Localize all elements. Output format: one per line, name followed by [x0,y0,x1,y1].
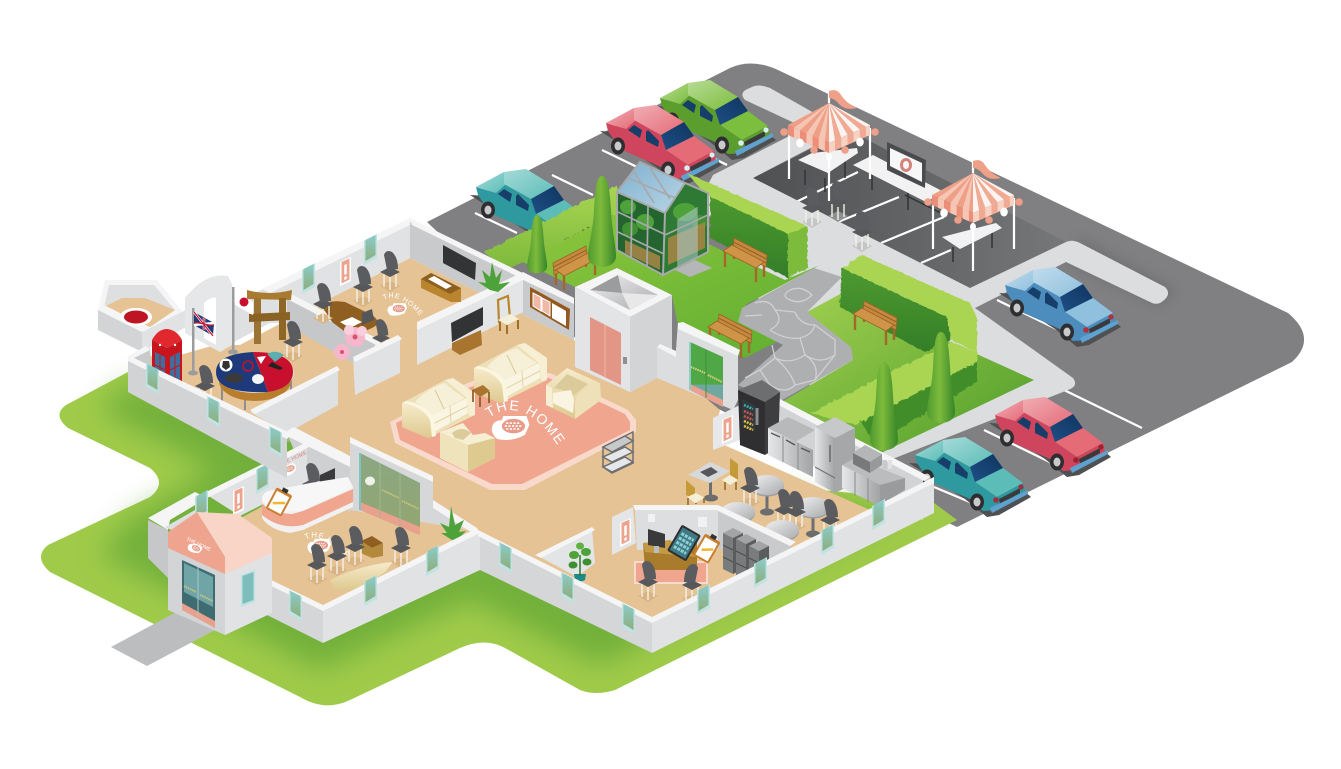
window front left 1 [426,545,439,576]
inner corner wall [134,348,152,375]
low table with papers [421,273,461,302]
green window 2 [256,463,269,494]
entrance walkway [111,610,215,666]
window right 3 [821,524,834,555]
stone path [738,268,853,403]
potted plant [568,542,592,582]
green window 1 [195,490,208,521]
office chair left [638,561,658,602]
window right 4 [872,499,885,530]
car: red top [600,105,722,185]
lounge rug [390,373,636,490]
cafe table 2 [796,497,830,538]
sofa left [402,378,475,438]
table: long display table [853,155,945,215]
torii gate [247,290,292,344]
garden bench 3 [708,314,752,358]
waiting chair 3 [345,526,365,567]
office rug [635,562,707,583]
market event area [780,90,1023,271]
hedge left [484,185,620,270]
meeting table [323,301,378,337]
rug logo mark [492,416,529,440]
car: red lower [989,397,1111,477]
chair by torii [283,321,303,362]
reception clipboard [265,485,294,517]
meeting room back wall [262,218,416,320]
sidewalks [700,86,1168,470]
cafe table 4 [765,520,799,560]
cherry blossom [334,325,367,360]
tree 4 [927,332,955,423]
fridge [815,417,855,493]
side table [472,385,490,407]
TV and cabinet [451,307,483,355]
cafe chair 4 [820,499,840,540]
logo text: THE HOME [279,450,308,468]
window lower 2 [561,572,574,603]
cafe table 1 [750,475,784,516]
plant by door wall [440,506,466,540]
porch logo text: THE HOME [185,536,212,553]
window lower 3 [622,603,635,634]
reception room [148,444,466,588]
porch logo [186,541,203,556]
window back wall 2 [364,234,377,265]
tree 2 [588,176,616,267]
display table [216,352,294,410]
cafe chair 2 [774,489,794,530]
chess chair 2 [722,458,738,490]
tan floor [130,258,878,625]
office [612,505,796,605]
left wall [128,346,292,478]
window left 3 [269,426,282,457]
parked cars behind hedge [470,80,1121,517]
partition near blossom [353,335,402,395]
window right 1 [697,584,710,615]
wall front right [652,477,934,653]
wall with potted plant [535,527,595,582]
waiting room logo [304,532,350,558]
car: teal top [470,169,592,249]
table: under second tent [942,223,1002,262]
notice board [530,287,570,330]
chess table [688,462,730,502]
meeting room logo [382,292,424,316]
car: blue [999,267,1121,347]
sofa centre [474,343,547,403]
wooden chair by wall [498,296,519,334]
tea trolley [603,432,633,473]
window back wall 1 [302,263,315,294]
logo mark [388,303,407,316]
elevator [575,268,672,392]
window porch wall [289,590,302,621]
chair outdoor 2 [828,181,848,222]
window left 2 [207,396,220,427]
window right 2 [754,557,767,588]
chair meeting 2 [353,266,373,307]
wall segment front left [323,528,480,643]
hedge right [687,173,808,278]
reception sign [233,486,244,515]
calculator [667,525,701,561]
cafe table 3 [721,502,755,542]
asphalt car park [427,63,1304,527]
counter right [842,458,905,506]
window lower 1 [499,542,512,573]
cafe chair 3 [786,491,806,532]
meeting room side wall [410,218,574,340]
parking bay lines [475,150,1142,508]
tree 1 [527,215,547,273]
car: green [654,80,776,160]
tree 3 [870,362,898,450]
rug logo text: THE HOME [484,400,565,445]
hedge far right [810,255,977,445]
coffee table [361,536,383,558]
logo mark [307,539,331,554]
garden bench 1 [553,246,597,290]
car: teal lower [909,437,1031,517]
reception monitor [320,468,335,491]
porch roof [168,512,225,574]
chair meeting 4 [372,319,390,356]
reception wall logo [279,450,308,478]
interior door wall [287,427,477,535]
logo text: THE HOME [304,532,350,558]
wall lower middle [478,530,652,653]
tent 2 [924,160,1023,271]
window front left 2 [364,575,377,606]
chair meeting 1 [313,283,333,324]
office chair right [682,564,702,605]
chair by table [195,365,215,406]
kitchen back wall [760,399,930,520]
tent 1 [780,90,879,201]
warning sign meeting room [340,257,351,286]
counter left [768,417,815,477]
reception back wall [148,442,311,578]
greenhouse [617,162,712,277]
wall TV meeting room [443,245,476,280]
chair outdoor 3 [852,211,872,252]
UK and Japan display room [134,287,303,410]
partition in front of display table [250,366,340,433]
lawn around building [41,372,957,705]
window left 1 [146,363,159,394]
waiting chair 2 [327,535,347,576]
microwave [853,445,892,473]
rug logo [484,400,565,445]
meeting room furniture [313,251,510,346]
porch window [241,570,255,607]
UK room partition [287,292,382,363]
lower garden lawn [780,293,1034,453]
logo text: THE HOME [382,292,424,316]
logo mark [280,462,298,478]
waiting chair 1 [307,544,327,585]
plant: spiky leaves [478,262,510,292]
wall segment by porch [267,578,323,643]
chair outdoor 1 [802,187,822,228]
garden bench 2 [723,238,767,282]
cafe chair 1 [740,467,760,508]
waiting sofa [330,562,393,590]
garden lawn [500,212,820,358]
phone box [152,329,182,395]
reception desk [262,477,353,533]
kitchen partition with sign [713,405,740,450]
wall with second TV [417,272,574,365]
office back wall [612,505,796,570]
chess chair 1 [686,480,705,505]
flagpole Japan [228,287,253,354]
waiting chair 4 [391,527,411,568]
table: under first tent [798,148,858,192]
japan garden alcove [98,280,186,352]
monitor [648,529,665,553]
desk [643,540,697,570]
chair meeting 3 [380,251,400,292]
porch [168,512,272,635]
entrance door [182,560,215,628]
sliding doors [360,453,420,535]
garden bench 4 [853,301,897,345]
door wall beside elevator [657,322,740,410]
armchair right [546,368,601,419]
kitchen [686,380,905,560]
filing cabinets [723,528,769,587]
reception chair [302,463,322,504]
flagpole UK [188,308,214,376]
vending machine [738,380,780,455]
arch wall [185,275,232,352]
office sign [620,518,631,547]
back wall behind torii [232,287,287,343]
clipboard [693,531,722,564]
display screen [887,142,926,188]
armchair front [440,423,495,472]
back walls [98,218,930,520]
outer walls [128,346,934,653]
